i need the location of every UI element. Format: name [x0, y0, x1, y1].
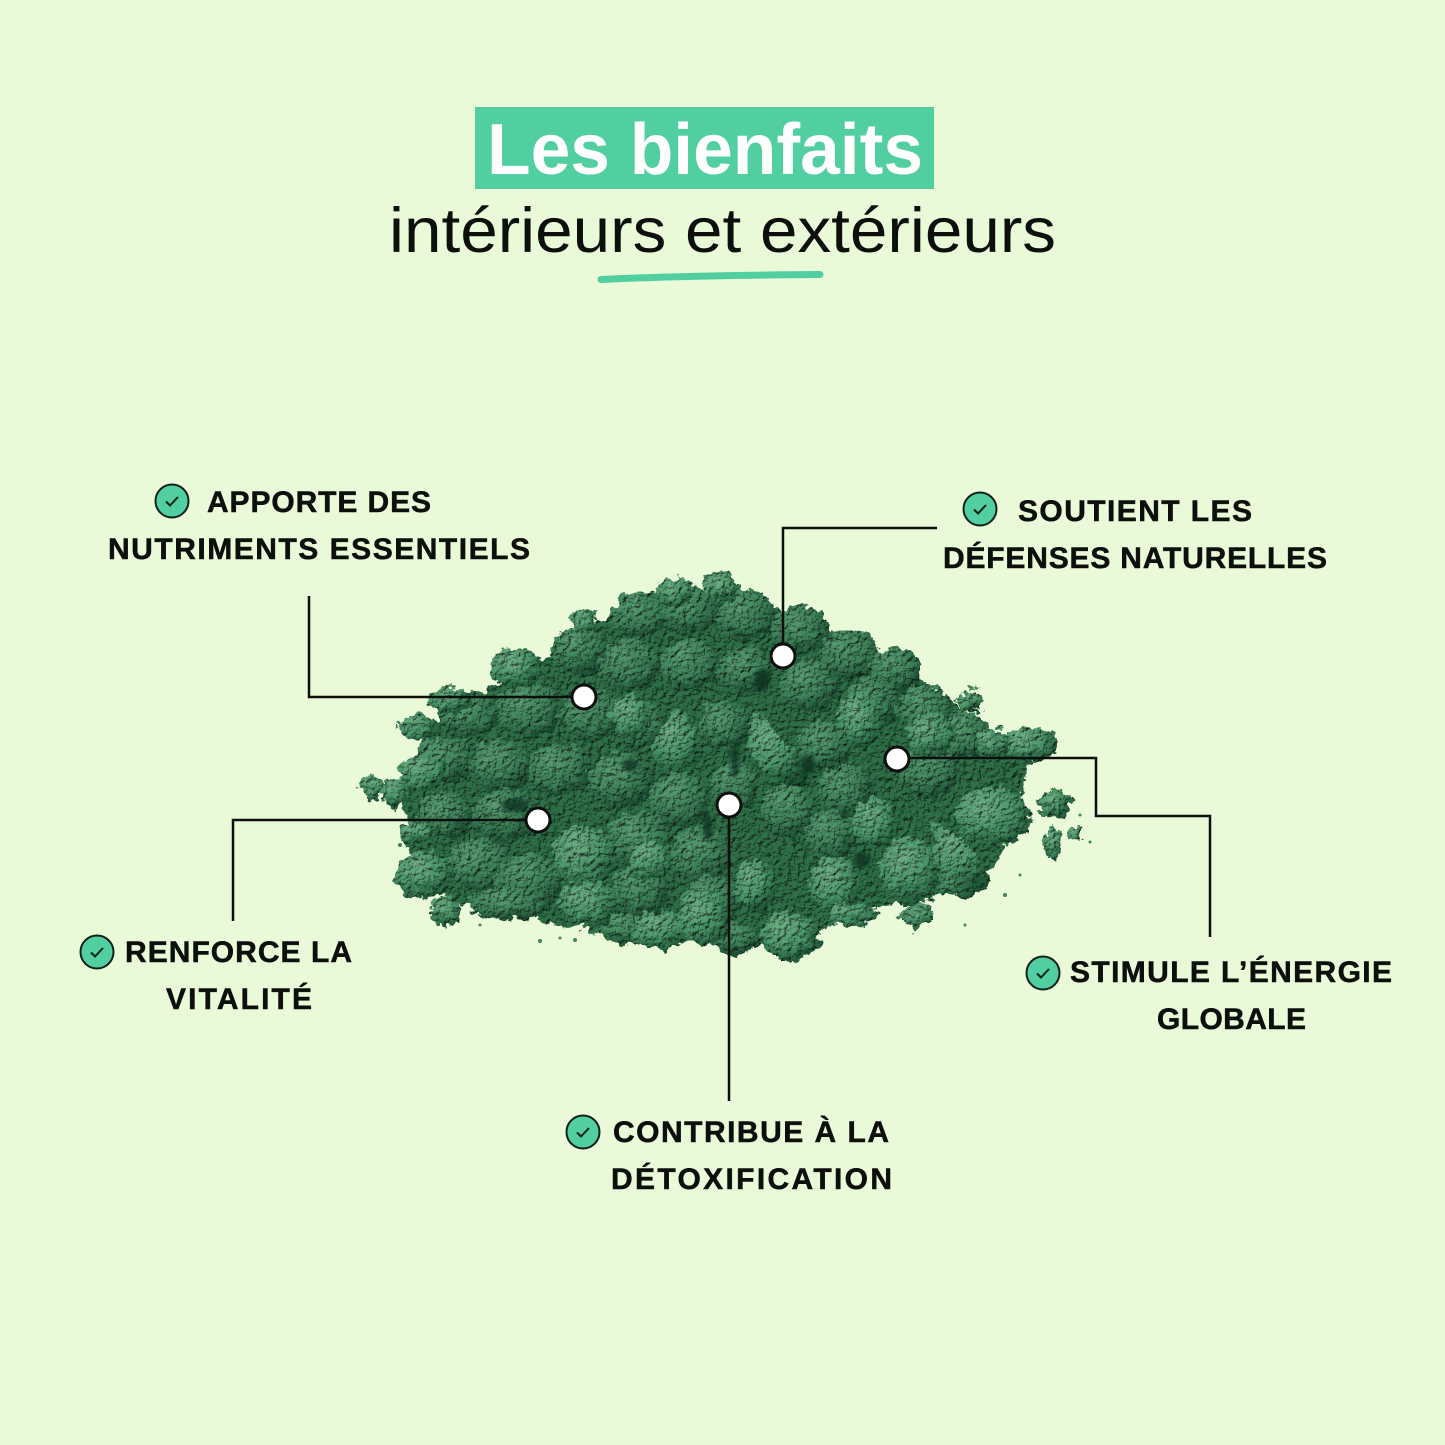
label: soutient les defenses naturelles: SOUTIENT LES	[1018, 495, 1252, 528]
icon: check	[1026, 956, 1060, 990]
label: renforce la vitalite	[80, 936, 352, 1016]
label: apporte des nutriments essentiels: APPORTE DES	[207, 486, 431, 519]
label: apporte des nutriments essentiels	[108, 484, 530, 566]
dot: nutriments	[572, 685, 596, 709]
label: renforce la vitalite: RENFORCE LA	[125, 936, 352, 969]
scattered specks	[398, 814, 1092, 943]
dot: energie	[885, 747, 909, 771]
connector lines	[233, 528, 1210, 1101]
title line 2: intérieurs et extérieurs	[389, 196, 1056, 266]
line: detox	[728, 817, 730, 1101]
dark crevices	[501, 669, 870, 868]
line: vitalite	[233, 820, 527, 921]
dot: defenses	[771, 644, 795, 668]
line: defenses	[783, 528, 937, 645]
title	[389, 107, 1056, 280]
powder pile image	[361, 573, 1092, 961]
label: contribue a la detoxification	[566, 1115, 892, 1196]
label: renforce la vitalite: VITALITÉ	[166, 982, 312, 1016]
label: stimule l'energie globale: GLOBALE	[1157, 1003, 1306, 1036]
label: apporte des nutriments essentiels: NUTRIMENTS ESSENTIELS	[108, 533, 530, 566]
label: contribue a la detoxification: DÉTOXIFICATION	[611, 1162, 892, 1196]
label: soutient les defenses naturelles: DÉFENSES NATURELLES	[943, 541, 1327, 575]
line: energie	[909, 758, 1210, 937]
marker dots	[526, 644, 909, 832]
title underline	[601, 274, 820, 280]
dot: vitalite	[526, 808, 550, 832]
icon: check	[80, 936, 114, 968]
icon: check	[156, 484, 188, 518]
icon: check	[964, 492, 996, 526]
line: nutriments	[309, 596, 572, 697]
label: contribue a la detoxification: CONTRIBUE À LA	[613, 1115, 889, 1149]
title line 1: Les bienfaits	[487, 110, 923, 190]
label: soutient les defenses naturelles	[943, 492, 1327, 575]
label: stimule l'energie globale: STIMULE L’ÉNERGIE	[1070, 955, 1392, 989]
title highlight box	[475, 107, 934, 189]
lit chunks	[650, 708, 702, 775]
powder mass	[361, 573, 1083, 961]
icon: check	[566, 1116, 600, 1148]
dot: detox	[717, 793, 741, 817]
label: stimule l'energie globale	[1026, 955, 1392, 1036]
